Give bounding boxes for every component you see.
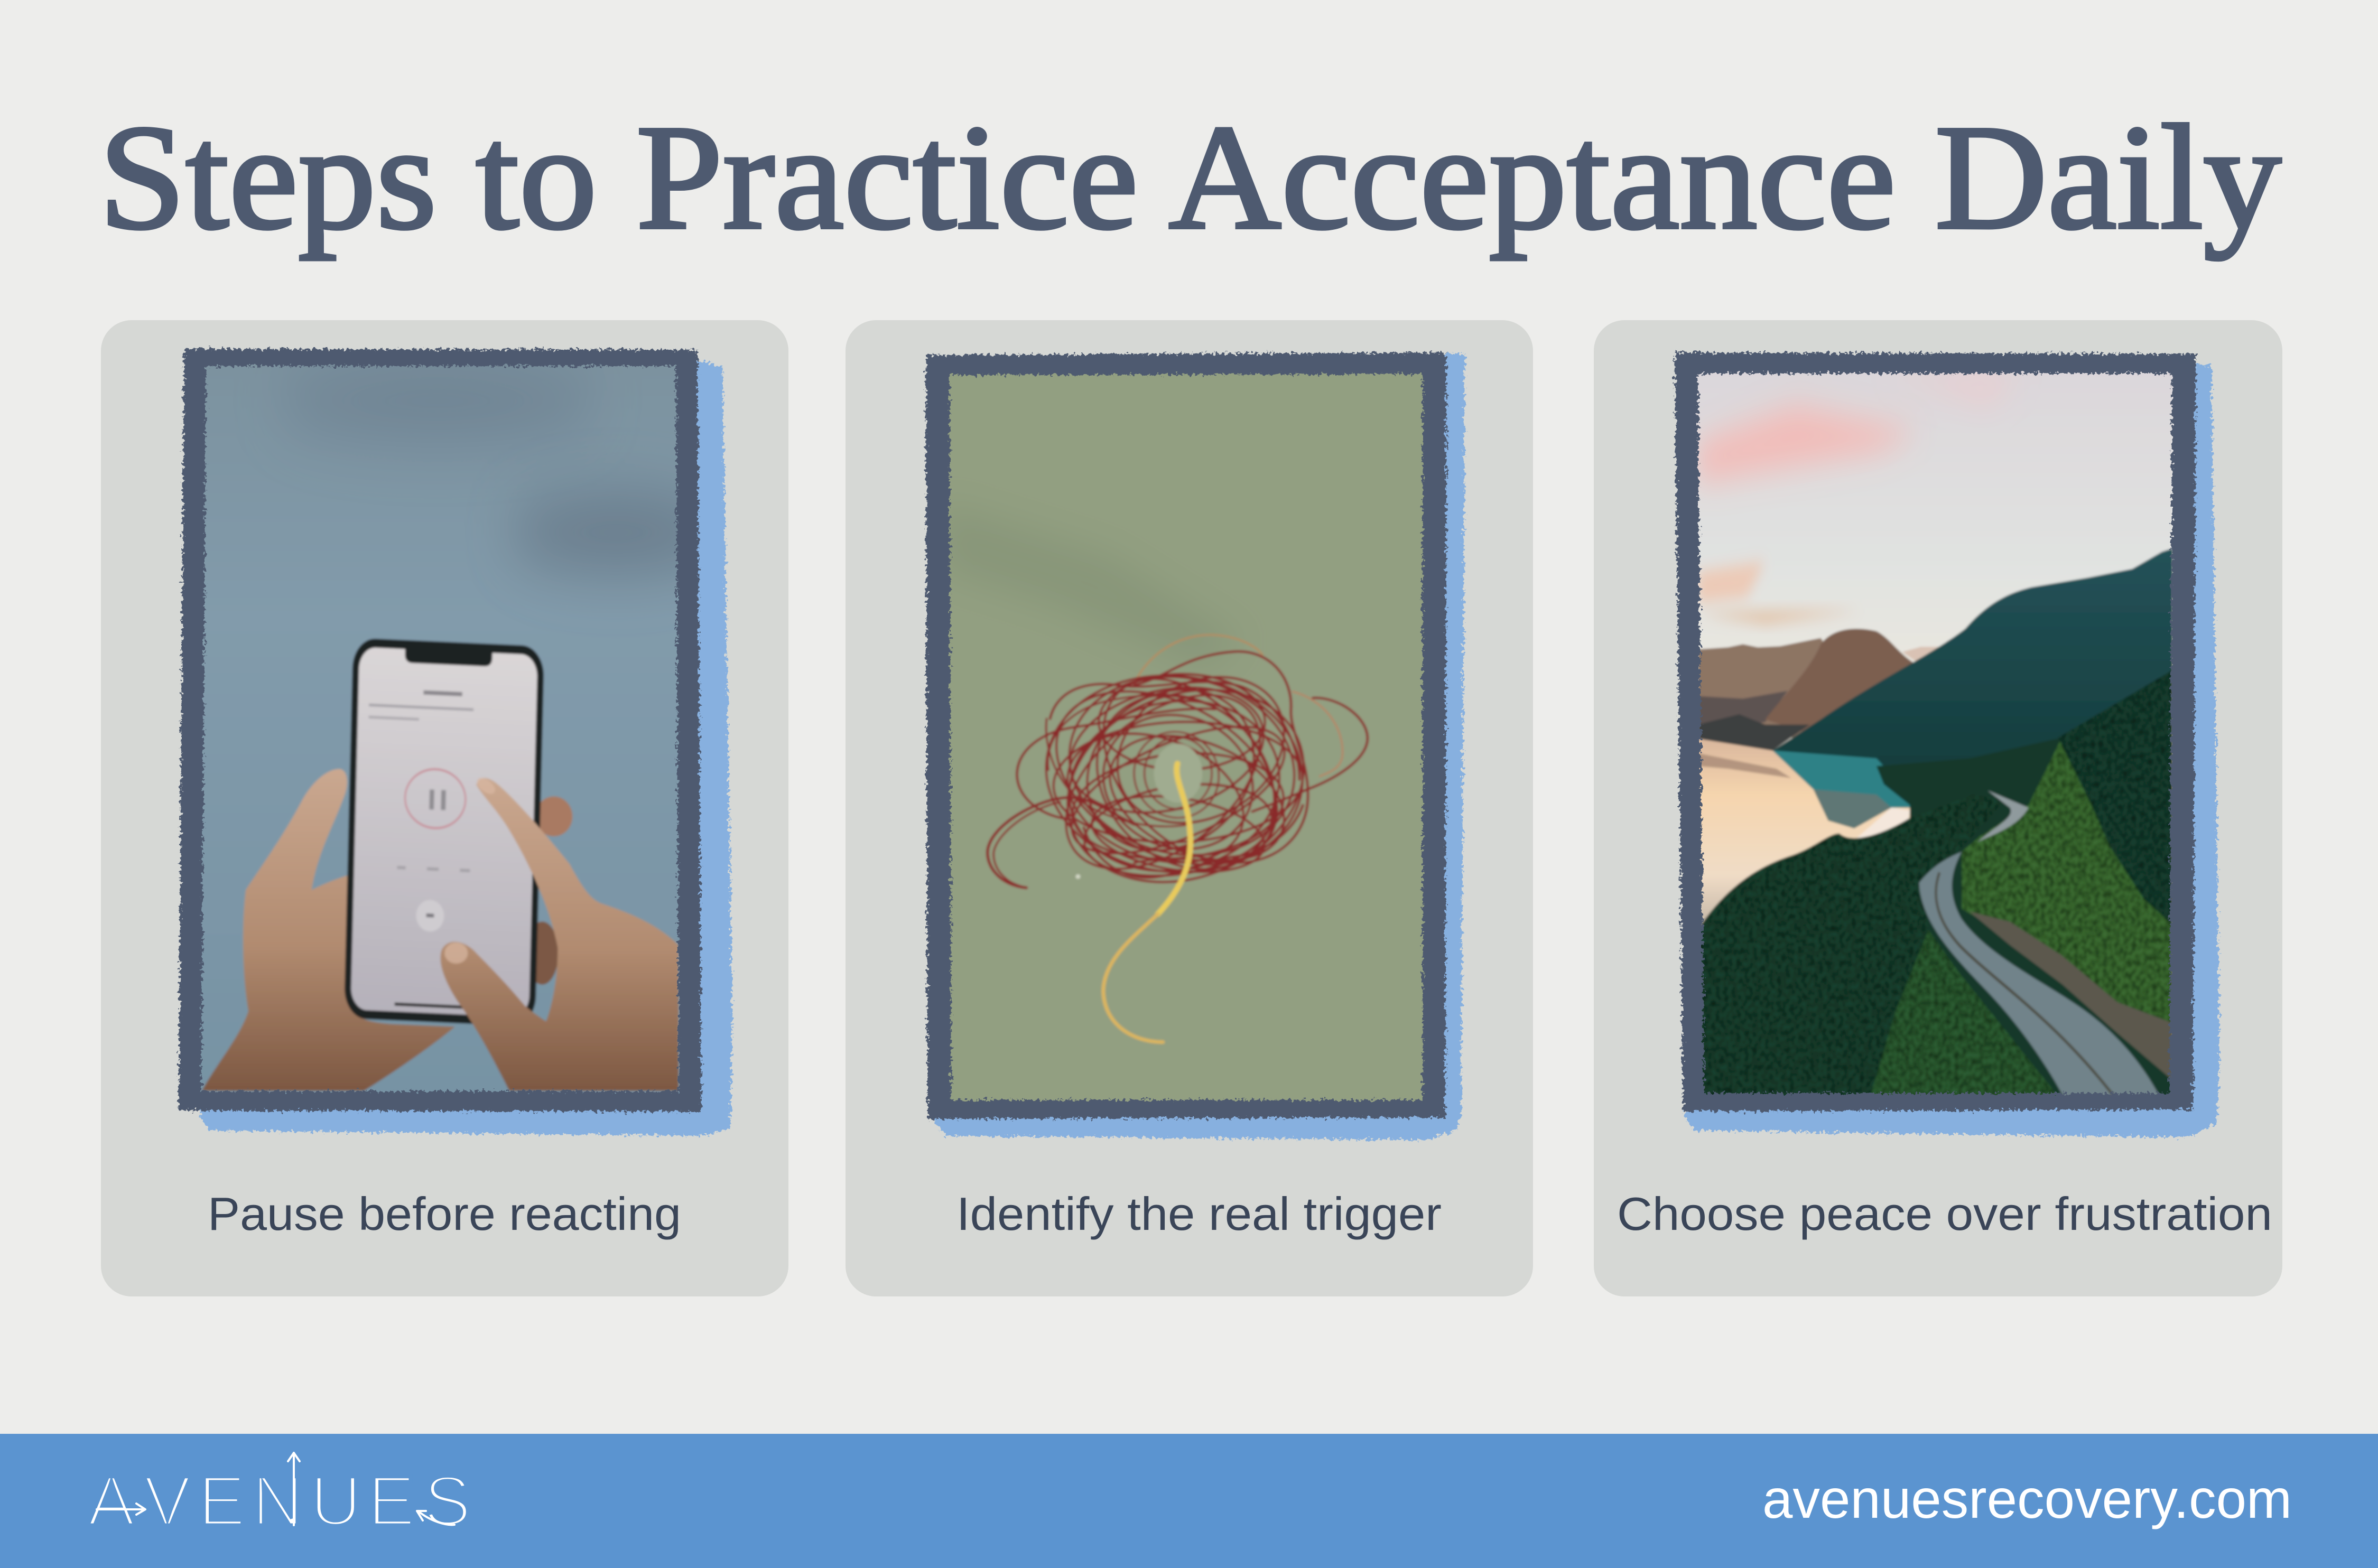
road <box>1919 852 2162 1101</box>
thread tangle <box>988 635 1368 913</box>
panel: choose peace over frustration <box>1594 320 2282 1296</box>
blue brush frame <box>199 359 732 1136</box>
rock cut <box>1969 911 2172 1080</box>
back fingers <box>535 797 572 836</box>
caption: Pause before reacting <box>208 1188 681 1240</box>
logo arrows <box>97 1453 454 1525</box>
panel: identify the real trigger <box>846 320 1533 1296</box>
photo: hands holding a phone <box>196 359 724 1096</box>
phone <box>344 638 544 1026</box>
big mountain <box>1772 548 2173 785</box>
card background <box>1594 320 2282 1296</box>
lower vegetation <box>1869 929 2062 1101</box>
photo: road through mountains at sunset <box>1691 364 2180 1106</box>
far mountains <box>1698 638 1840 738</box>
photo: tangled thread <box>941 367 1429 1104</box>
card background <box>101 320 788 1296</box>
logo: Avenues <box>88 1453 471 1541</box>
caption: Choose peace over frustration <box>1617 1188 2272 1240</box>
website url: avenuesrecovery.com <box>1762 1469 2292 1530</box>
golden thread <box>1075 763 1191 1042</box>
logo wordmark: AVENUES <box>88 1462 471 1541</box>
footer band <box>0 1434 2378 1568</box>
card background <box>846 320 1533 1296</box>
peak <box>1765 629 1917 738</box>
blue brush frame <box>1684 365 2219 1137</box>
left forest <box>1698 795 2062 1101</box>
valley base <box>1698 670 2173 1101</box>
dark brush frame <box>926 352 1446 1119</box>
band background <box>0 1434 2378 1568</box>
lake <box>1698 735 1913 935</box>
blue brush frame <box>933 353 1465 1140</box>
caption: Identify the real trigger <box>956 1188 1442 1240</box>
right slope <box>1962 670 2172 1023</box>
dark brush frame <box>179 349 701 1112</box>
title: Steps to Practice Acceptance Daily <box>99 95 2281 260</box>
sky glow <box>1698 406 1921 483</box>
dark brush frame <box>1675 352 2196 1112</box>
panel: pause before reacting <box>101 320 788 1296</box>
lake reflection <box>1772 751 1910 828</box>
